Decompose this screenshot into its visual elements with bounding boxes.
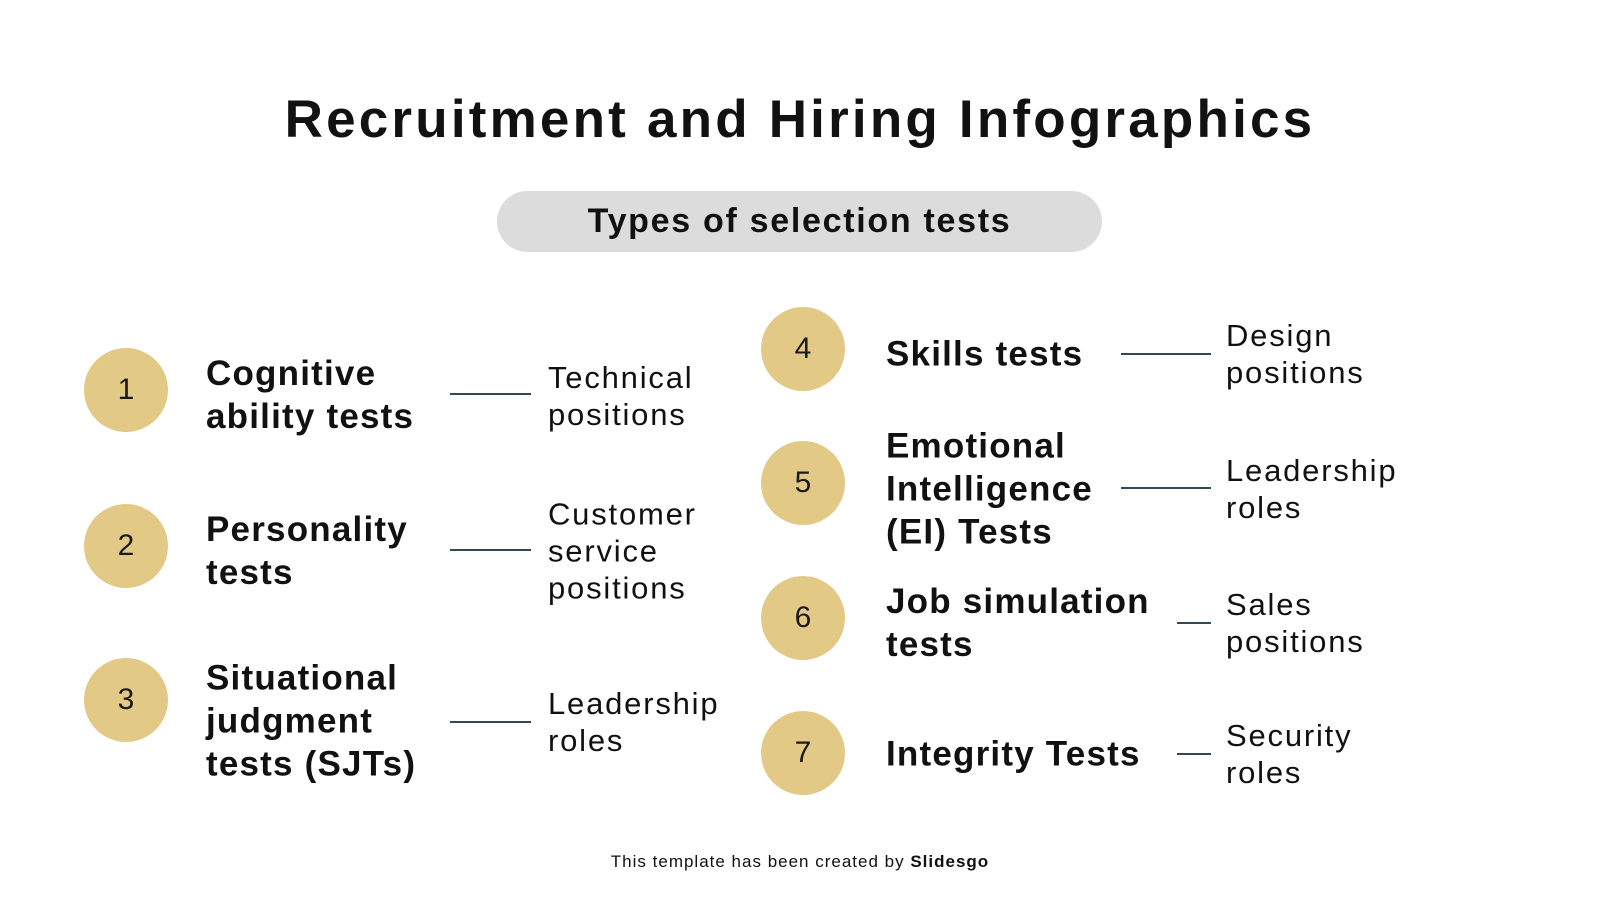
description 2: positions: [548, 570, 687, 606]
description 5: [1226, 453, 1397, 525]
icon: circle 2: 2: [118, 529, 134, 562]
icon: circle 7: 7: [795, 736, 811, 769]
connector 1: [450, 393, 531, 395]
description 4: Design: [1226, 318, 1333, 353]
connector 4: [1121, 353, 1211, 355]
icon: circle 5: 5: [795, 466, 811, 499]
title: Recruitment and Hiring Infographics: [285, 90, 1315, 149]
icon: circle 6: 6: [795, 601, 811, 634]
label 3: [205, 658, 416, 784]
item 5: [761, 426, 1397, 552]
description 1: Technical: [548, 360, 693, 395]
icon: circle 3: 3: [118, 683, 134, 716]
icon: circle 5: [761, 441, 845, 525]
icon: circle 3: [84, 658, 168, 742]
item 1: [84, 348, 693, 436]
label 5: Intelligence: [886, 470, 1093, 508]
description 7: Security: [1226, 718, 1352, 753]
connector 7: [1177, 753, 1211, 755]
label 1: [206, 354, 414, 436]
description 4: [1226, 318, 1365, 390]
item 3: [84, 658, 719, 784]
label 4: Skills tests: [886, 334, 1083, 374]
icon: circle 1: [84, 348, 168, 432]
item 6: [761, 576, 1365, 664]
label 1: ability tests: [206, 397, 414, 436]
label 2: Personality: [206, 510, 408, 549]
icon: circle 4: [761, 307, 845, 391]
footer credit: This template has been created by Slidesgo: [611, 852, 989, 871]
description 5: Leadership: [1226, 453, 1397, 488]
icon: circle 1: 1: [118, 373, 134, 406]
icon: circle 6: [761, 576, 845, 660]
connector 3: [450, 721, 531, 723]
description 5: roles: [1226, 490, 1302, 525]
label 6: Job simulation: [886, 582, 1150, 621]
connector 5: [1121, 487, 1211, 489]
label 6: [886, 582, 1150, 664]
label 1: Cognitive: [206, 354, 376, 393]
icon: circle 7: [761, 711, 845, 795]
label 5: [886, 426, 1093, 552]
connector 6: [1177, 622, 1211, 624]
description 2: Customer: [548, 496, 697, 532]
description 3: roles: [548, 723, 624, 758]
description 2: [548, 496, 697, 606]
item 7: [761, 711, 1352, 795]
description 6: [1226, 587, 1365, 659]
description 3: Leadership: [548, 686, 719, 721]
label 5: (EI) Tests: [886, 512, 1053, 552]
item 4: [761, 307, 1365, 391]
label 2: [206, 510, 408, 592]
connector 2: [450, 549, 531, 551]
label 3: tests (SJTs): [206, 744, 416, 784]
subtitle pill: [497, 191, 1102, 252]
description 3: [548, 686, 719, 758]
description 1: [548, 360, 693, 432]
description 2: service: [548, 534, 659, 568]
label 3: judgment: [206, 702, 373, 740]
label 5: Emotional: [886, 426, 1066, 466]
subtitle pill: Types of selection tests: [588, 202, 1011, 240]
description 1: positions: [548, 397, 687, 432]
label 3: Situational: [206, 658, 398, 698]
icon: circle 2: [84, 504, 168, 588]
icon: circle 4: 4: [795, 332, 811, 365]
label 7: Integrity Tests: [886, 734, 1141, 774]
description 6: Sales: [1226, 587, 1313, 622]
description 6: positions: [1226, 624, 1365, 659]
description 7: roles: [1226, 755, 1302, 790]
description 4: positions: [1226, 355, 1365, 390]
item 2: [84, 496, 697, 606]
label 2: tests: [206, 553, 294, 592]
label 6: tests: [886, 625, 974, 664]
description 7: [1226, 718, 1352, 790]
